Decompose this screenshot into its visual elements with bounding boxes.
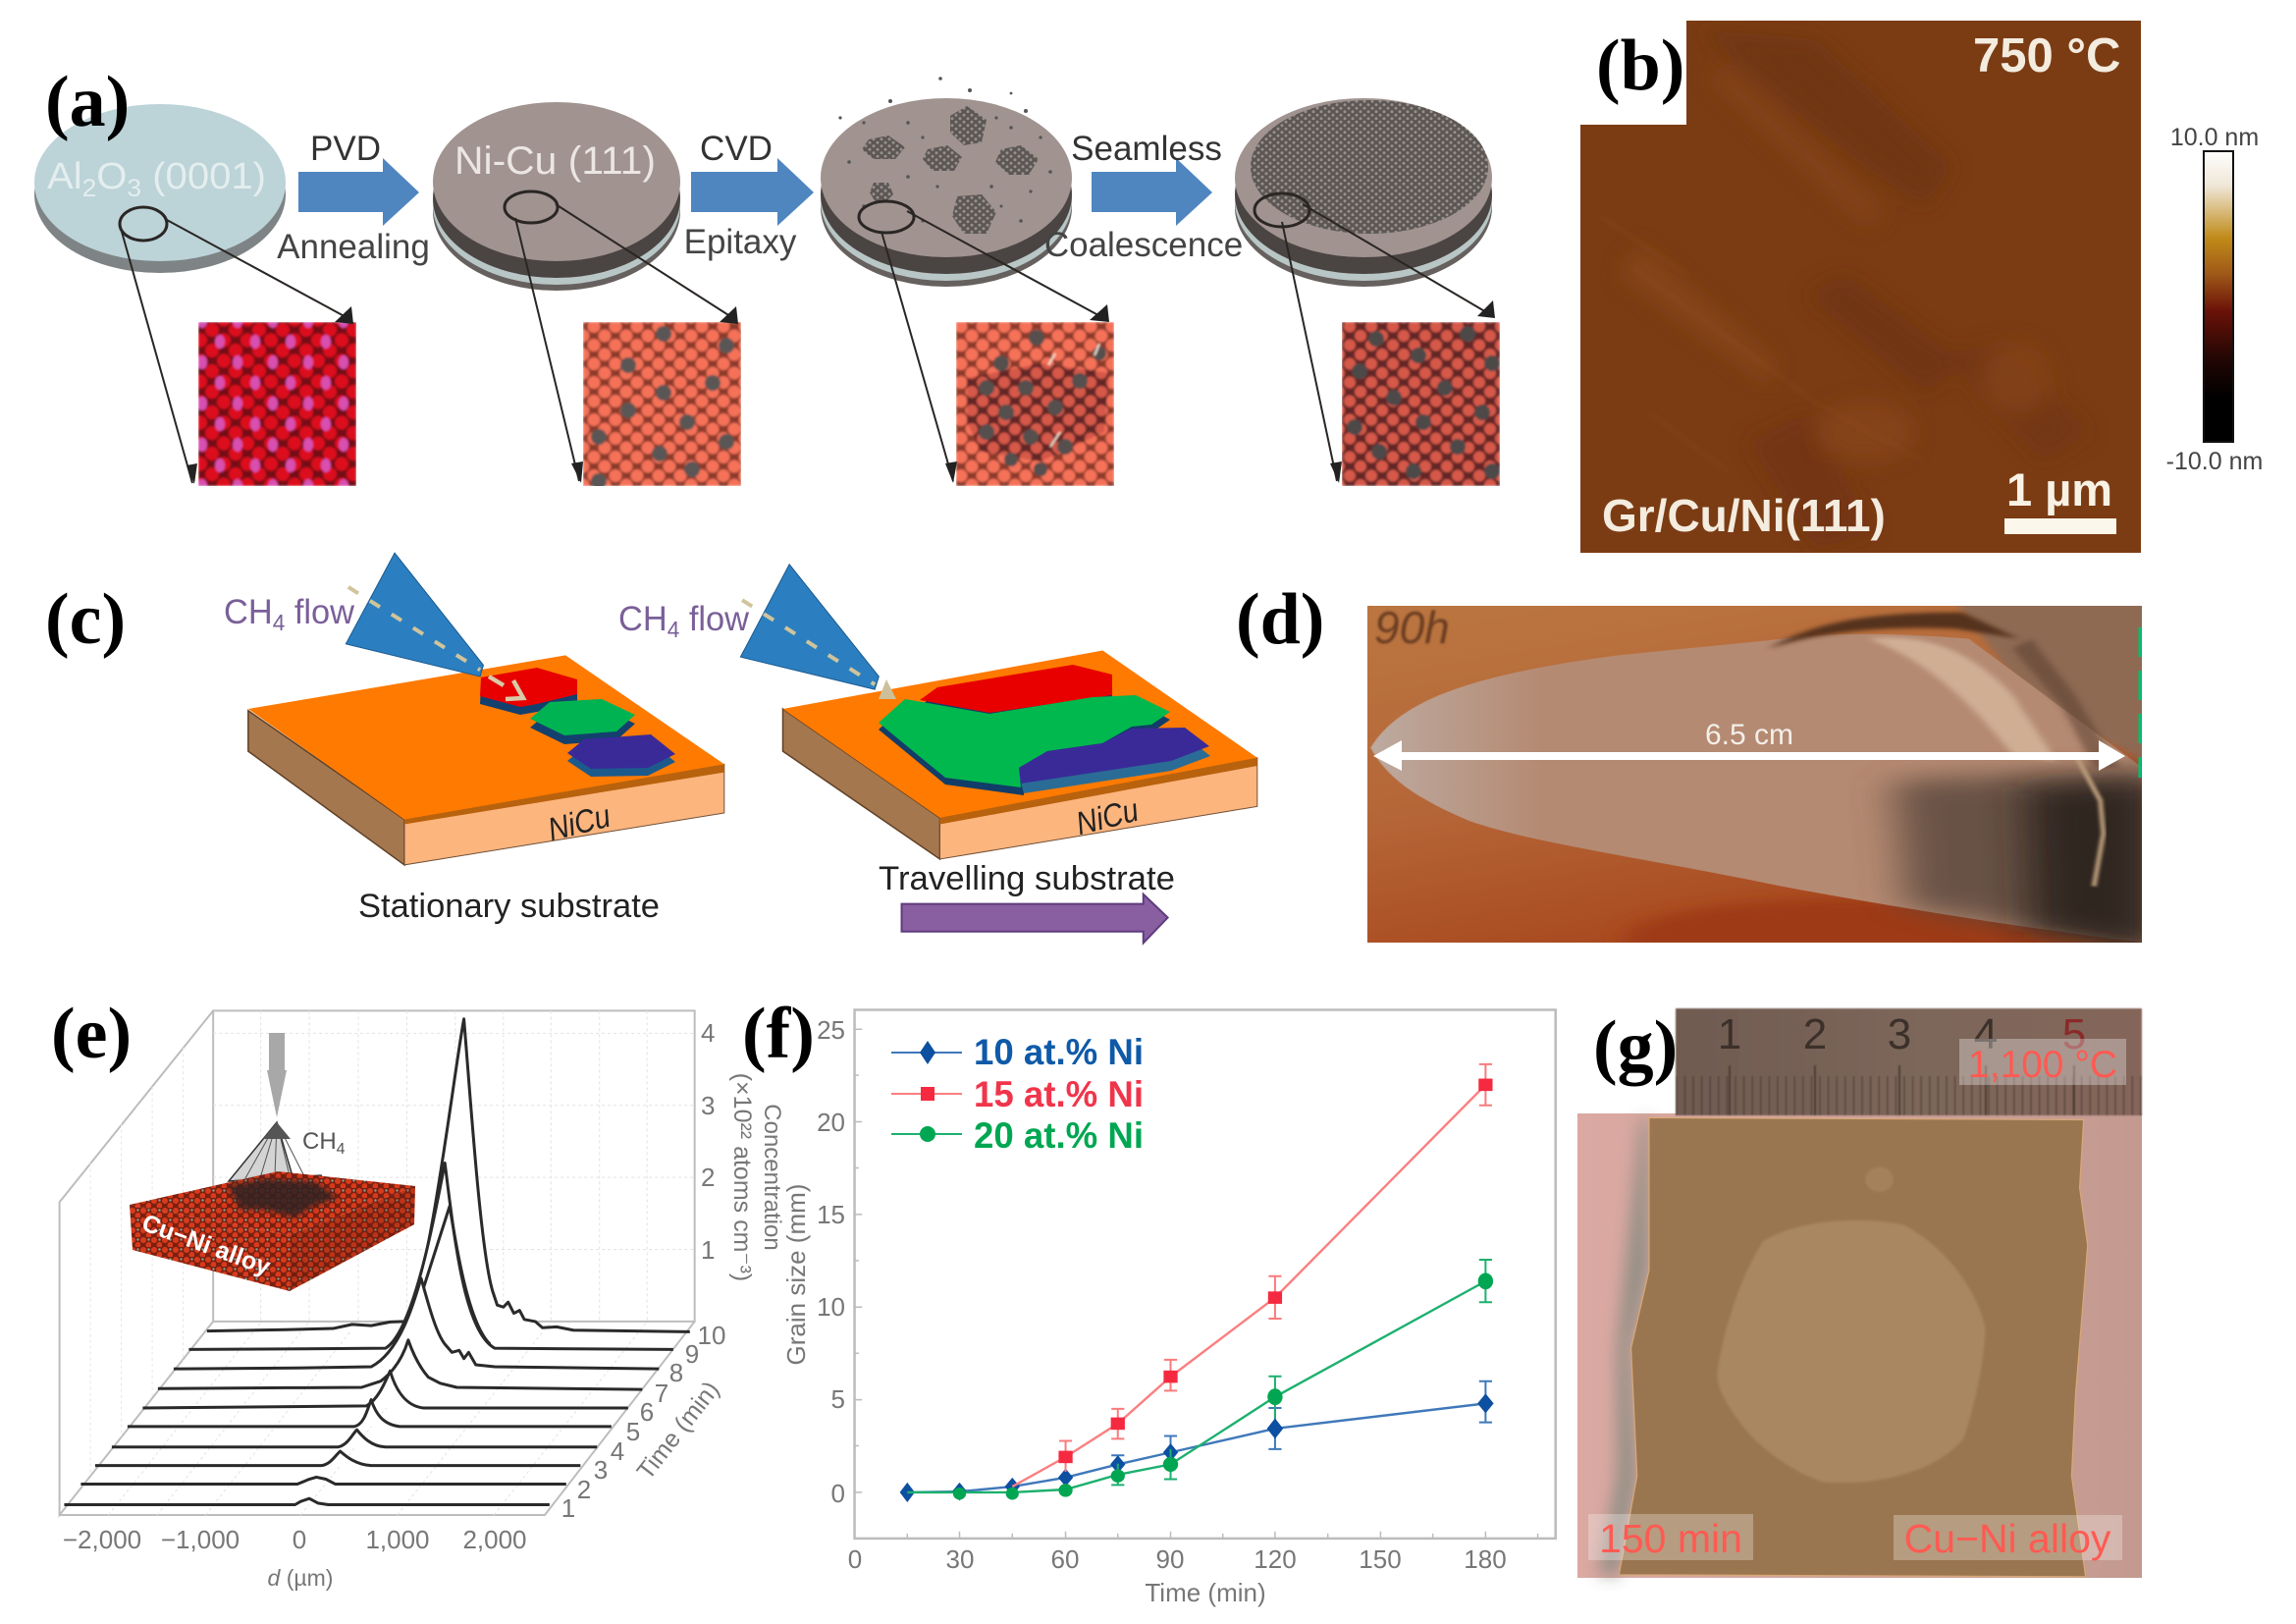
legend: 10 at.% Ni <box>974 1032 1144 1072</box>
stationary substrate labels <box>224 593 660 925</box>
y axis tick labels: 20 <box>817 1108 845 1137</box>
arrow: CVD epitaxy: CVD <box>700 130 773 168</box>
travelling substrate labels: CH <box>618 600 668 638</box>
concentration axis title of panel e: (×10²² atoms cm⁻³) <box>728 1073 756 1281</box>
travelling substrate labels: 4 <box>667 617 679 642</box>
inset: CH4 on Cu-Ni alloy block: 4 <box>337 1141 346 1158</box>
time axis ticks: 5 <box>626 1417 640 1446</box>
y axis ticks: 4 <box>701 1018 715 1048</box>
scale bar: 1 µm <box>2006 463 2112 515</box>
distance axis title: d (µm) <box>268 1565 333 1591</box>
y axis tick labels: 10 <box>817 1292 845 1322</box>
x axis title: Time (min) <box>1145 1578 1266 1607</box>
panel label (g): (g) <box>1593 1006 1678 1087</box>
stationary substrate nozzle <box>346 553 483 677</box>
panel label (c): (c) <box>45 579 126 660</box>
wafer: Ni-Cu <box>433 102 680 291</box>
arrow: seamless coalescence <box>1044 130 1243 264</box>
arrow: travel direction <box>902 894 1168 943</box>
wafer: Al2O3: O <box>96 156 127 197</box>
x axis tick labels: 90 <box>1156 1544 1184 1574</box>
stationary substrate block <box>248 655 724 865</box>
x axis tick labels: 120 <box>1254 1544 1297 1574</box>
annotation: temperature: 1,100 °C <box>1968 1044 2117 1086</box>
stationary substrate labels: NiCu <box>544 797 614 847</box>
colour bar with range labels: 10.0 nm <box>2170 124 2259 151</box>
inset: CH4 on Cu-Ni alloy block: CH <box>302 1128 337 1155</box>
legend <box>891 1032 1144 1156</box>
panel: (f) grain size chart <box>728 994 1556 1607</box>
series: 10 at.% Ni <box>900 1381 1494 1502</box>
ruler: 4 <box>1974 1010 1998 1058</box>
travelling substrate labels: Travelling substrate <box>879 860 1175 897</box>
panel: (a) wafer process schematic <box>34 62 1500 489</box>
green edge dashes <box>2138 627 2142 778</box>
time axis ticks: 10 <box>698 1321 725 1350</box>
inset: CH4 on Cu-Ni alloy block <box>130 1033 415 1291</box>
panel label (b): (b) <box>1596 26 1684 106</box>
panel: (b) AFM image <box>1571 15 2263 565</box>
time axis ticks: 1 <box>561 1493 575 1523</box>
distance axis ticks: 1,000 <box>365 1525 430 1554</box>
y axis tick labels: 25 <box>817 1015 845 1045</box>
concentration axis title of panel e <box>728 1073 785 1281</box>
legend: 15 at.% Ni <box>974 1074 1144 1114</box>
stationary substrate labels: flow <box>285 593 355 631</box>
plot frame <box>855 1010 1556 1539</box>
distance axis ticks: −2,000 <box>63 1525 141 1554</box>
annotation: time: 150 min <box>1599 1516 1742 1561</box>
wafer: coalesced graphene <box>1235 98 1492 287</box>
time axis ticks: 6 <box>640 1397 654 1427</box>
ruler: 2 <box>1803 1010 1827 1058</box>
panel: (d) centimetre-scale graphene photo <box>1236 579 2157 979</box>
wafer: graphene islands <box>821 77 1072 287</box>
magnifier circles and zoom arrows <box>120 191 1495 484</box>
arrow: seamless coalescence: Seamless <box>1071 130 1222 168</box>
arrow: seamless coalescence: Coalescence <box>1044 226 1243 264</box>
panel: (c) CH4 flow substrates <box>45 553 1257 943</box>
waterfall traces at 1 to 10 min <box>64 1019 690 1505</box>
x axis tick labels: 150 <box>1359 1544 1402 1574</box>
stationary substrate labels: CH <box>224 593 274 631</box>
image annotation: temperature: 750 °C <box>1973 29 2120 82</box>
colour bar with range labels <box>2166 124 2263 475</box>
y axis ticks: 3 <box>701 1091 715 1120</box>
arrow: PVD annealing: Annealing <box>277 228 430 266</box>
distance axis ticks: −1,000 <box>161 1525 240 1554</box>
stationary substrate labels: 4 <box>273 610 285 635</box>
x axis tick labels: 0 <box>848 1544 862 1574</box>
copper foil with graphene grain <box>1599 1117 2088 1577</box>
stationary substrate labels: Stationary substrate <box>358 888 660 925</box>
panel: (e) concentration waterfall chart <box>51 994 725 1591</box>
distance axis ticks: 0 <box>293 1525 306 1554</box>
distance axis ticks: 2,000 <box>462 1525 527 1554</box>
time axis ticks: 3 <box>594 1455 608 1485</box>
time axis ticks: 8 <box>669 1358 683 1387</box>
wafer: Al2O3: Al <box>47 156 80 197</box>
time axis ticks <box>561 1321 725 1523</box>
arrow: PVD annealing <box>277 130 430 266</box>
panel label (a): (a) <box>45 62 130 142</box>
y axis title: Grain size (mm) <box>781 1184 811 1365</box>
inset: graphene nucleation lattice <box>956 322 1114 486</box>
time axis ticks: 4 <box>611 1436 624 1466</box>
y axis tick labels: 0 <box>831 1479 845 1508</box>
ruler <box>1676 1008 2142 1115</box>
travelling substrate labels: NiCu <box>1072 791 1142 841</box>
time axis ticks: 2 <box>577 1475 591 1504</box>
wafer: Al2O3 <box>34 104 286 273</box>
time axis ticks: 7 <box>655 1379 668 1408</box>
y axis tick labels <box>817 1015 845 1508</box>
legend: 20 at.% Ni <box>974 1115 1144 1156</box>
y axis tick labels: 5 <box>831 1384 845 1414</box>
annotation: material: Cu−Ni alloy <box>1904 1516 2111 1561</box>
y axis ticks <box>701 1018 715 1265</box>
panel: (g) foil photo <box>1577 1006 2142 1578</box>
travelling substrate block <box>782 650 1257 859</box>
concentration axis title of panel e: Concentration <box>759 1104 785 1251</box>
time axis title: Time (min) <box>631 1377 725 1485</box>
time axis ticks: 9 <box>685 1339 699 1369</box>
wafer: Ni-Cu: Ni-Cu (111) <box>454 139 656 183</box>
panel label (d): (d) <box>1236 579 1324 660</box>
panel label (e): (e) <box>51 994 132 1074</box>
length label: 6.5 cm <box>1705 719 1793 751</box>
x axis tick labels: 60 <box>1051 1544 1079 1574</box>
x axis tick labels: 180 <box>1464 1544 1507 1574</box>
travelling substrate labels: flow <box>679 600 750 638</box>
series: 15 at.% Ni <box>1012 1064 1493 1487</box>
inset: graphene full coverage lattice <box>1342 322 1500 486</box>
colour bar with range labels: -10.0 nm <box>2166 448 2263 475</box>
y axis tick labels: 15 <box>817 1200 845 1229</box>
arrow: PVD annealing: PVD <box>310 130 381 168</box>
wafer: Al2O3: 2 <box>82 175 96 202</box>
scale bar <box>2004 463 2116 534</box>
y axis ticks: 1 <box>701 1235 715 1265</box>
photo of graphene grain: 90h <box>1374 602 1450 653</box>
3D axes frame and grid <box>60 1010 695 1515</box>
panel label (f): (f) <box>742 994 815 1074</box>
inset: Ni-Cu lattice <box>583 322 741 489</box>
travelling substrate labels <box>618 600 1175 897</box>
ruler: 5 <box>2062 1010 2086 1058</box>
travelling substrate nozzle <box>740 565 879 689</box>
double arrow: grain length <box>1373 740 2125 771</box>
y axis ticks: 2 <box>701 1163 715 1192</box>
distance axis ticks <box>63 1525 527 1554</box>
arrow: CVD epitaxy <box>684 130 814 261</box>
photo background <box>1577 1113 2142 1578</box>
arrow: CVD epitaxy: Epitaxy <box>684 223 797 261</box>
wafer: Al2O3: (0001) <box>141 156 266 197</box>
x axis tick labels <box>848 1544 1507 1574</box>
image annotation: sample name: Gr/Cu/Ni(111) <box>1602 490 1886 541</box>
x axis tick labels: 30 <box>946 1544 974 1574</box>
ruler: 3 <box>1888 1010 1911 1058</box>
photo of graphene grain <box>1367 606 2142 943</box>
inset: CH4 on Cu-Ni alloy block: Cu−Ni alloy <box>138 1209 274 1281</box>
wafer: Al2O3: 3 <box>127 175 141 202</box>
inset: sapphire lattice <box>198 322 356 486</box>
AFM height map <box>1571 15 2160 565</box>
ruler: 1 <box>1718 1010 1741 1058</box>
series: 20 at.% Ni <box>907 1260 1493 1499</box>
